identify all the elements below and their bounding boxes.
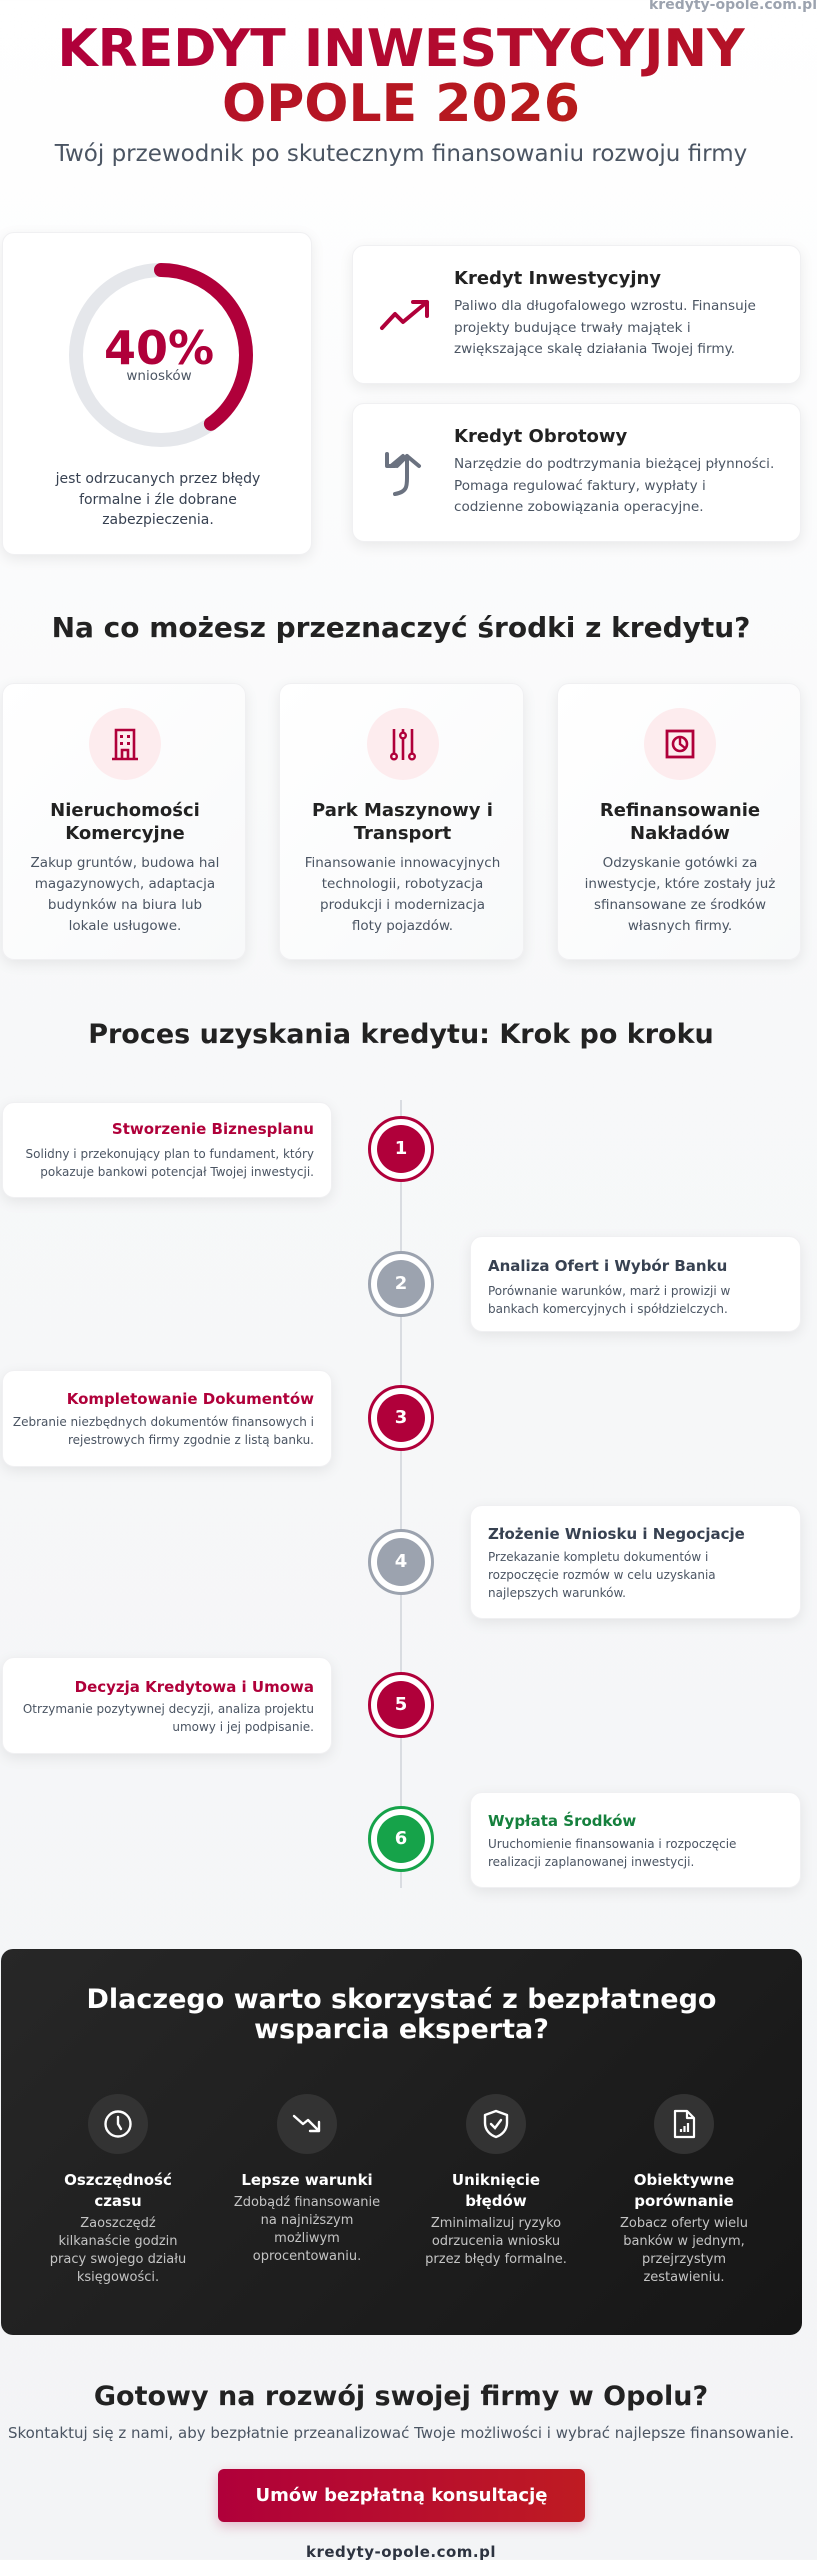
icon: trend up — [380, 300, 430, 330]
dark heading — [87, 1984, 716, 2045]
title — [57, 19, 745, 134]
step marker 4 — [368, 1529, 434, 1595]
cta button: Umów bezpłatną konsultację — [256, 2485, 547, 2506]
benefit: obiektywne porównanie: porównanie — [634, 2192, 734, 2210]
benefit: obiektywne porównanie: zestawieniu. — [643, 2270, 725, 2285]
step marker 3 — [368, 1385, 434, 1451]
card text: Odzyskanie gotówki za — [603, 855, 757, 871]
benefit: obiektywne porównanie: przejrzystym — [642, 2252, 726, 2267]
benefit: oszczędność czasu: pracy swojego działu — [50, 2252, 186, 2267]
title: OPOLE 2026 — [222, 74, 580, 134]
stat description: formalne i źle dobrane — [79, 492, 237, 508]
card title: Komercyjne — [65, 823, 185, 844]
step 6 — [470, 1792, 801, 1888]
benefit: obiektywne porównanie — [620, 2094, 748, 2285]
heading: Kredyt Obrotowy — [454, 426, 627, 447]
step marker 5: 5 — [395, 1694, 407, 1715]
card text: własnych firmy. — [628, 918, 732, 934]
benefit: lepsze warunki — [234, 2094, 380, 2264]
dark heading: wsparcia eksperta? — [254, 2014, 549, 2045]
benefit: oszczędność czasu — [50, 2094, 186, 2285]
dark heading: Dlaczego warto skorzystać z bezpłatnego — [87, 1984, 716, 2015]
panel: nieruchomości — [2, 683, 246, 960]
card text — [305, 855, 500, 934]
stat label: wniosków — [126, 368, 192, 384]
step 5: Otrzymanie pozytywnej decyzji, analiza projektu umowy i jej podpisanie. — [23, 1702, 314, 1734]
step 3 — [2, 1370, 332, 1467]
cta text: Skontaktuj się z nami, aby bezpłatnie przeanalizować Twoje możliwości i wybrać najlepsze finansowanie. — [8, 2424, 794, 2442]
stat description: zabezpieczenia. — [102, 512, 214, 528]
step 6: Wypłata Środków — [488, 1812, 636, 1830]
panel: park maszynowy — [279, 683, 524, 960]
step 1: Solidny i przekonujący plan to fundament, który pokazuje bankowi potencjał Twojej inwestycji. — [26, 1147, 314, 1179]
benefit: lepsze warunki: możliwym — [274, 2231, 340, 2246]
step marker 4: 4 — [395, 1551, 407, 1572]
title: KREDYT INWESTYCYJNY — [57, 19, 745, 79]
heading: proces: Proces uzyskania kredytu: Krok po kroku — [88, 1019, 714, 1050]
text: Narzędzie do podtrzymania bieżącej płynności. — [454, 456, 774, 472]
step marker 6: 6 — [395, 1828, 407, 1849]
heading: Kredyt Inwestycyjny — [454, 268, 661, 289]
step 6: Uruchomienie finansowania i rozpoczęcie realizacji zaplanowanej inwestycji. — [488, 1837, 736, 1869]
step 3: Kompletowanie Dokumentów — [67, 1390, 314, 1408]
text: codzienne zobowiązania operacyjne. — [454, 499, 704, 515]
step marker 5 — [368, 1672, 434, 1738]
card text: produkcji i modernizacja — [320, 897, 485, 913]
step 5: Decyzja Kredytowa i Umowa — [75, 1678, 314, 1696]
stat description — [55, 471, 260, 528]
panel: stat card — [2, 232, 312, 555]
step 1: Stworzenie Biznesplanu — [112, 1120, 314, 1138]
text: Paliwo dla długofalowego wzrostu. Finansuje — [454, 298, 756, 314]
card title: Refinansowanie — [600, 800, 760, 821]
card title — [600, 800, 760, 844]
step 2: Porównanie warunków, marż i prowizji w bankach komercyjnych i spółdzielczych. — [488, 1284, 730, 1316]
step 4: Przekazanie kompletu dokumentów i rozpoczęcie rozmów w celu uzyskania najlepszych warunków. — [488, 1550, 716, 1600]
card title: Nieruchomości — [50, 800, 200, 821]
step 3: Zebranie niezbędnych dokumentów finansowych i rejestrowych firmy zgodnie z listą banku. — [13, 1415, 314, 1447]
icon: sliders — [367, 708, 439, 780]
card text — [31, 855, 219, 934]
text: zwiększające skalę działania Twojej firmy. — [454, 341, 735, 357]
benefit: oszczędność czasu: Zaoszczędź — [80, 2216, 156, 2231]
step marker 1: 1 — [395, 1138, 407, 1159]
heading: na co: Na co możesz przeznaczyć środki z kredytu? — [52, 611, 750, 644]
step marker 2: 2 — [395, 1273, 407, 1294]
card text: sfinansowane ze środków — [594, 897, 766, 913]
benefit: lepsze warunki: Zdobądź finansowanie — [234, 2195, 380, 2210]
panel: dlaczego warto (dark) — [1, 1949, 802, 2335]
step marker 1 — [368, 1116, 434, 1182]
card text: floty pojazdów. — [352, 918, 453, 934]
card text: Finansowanie innowacyjnych — [305, 855, 500, 871]
benefit: uniknięcie błędów: Uniknięcie — [452, 2171, 540, 2189]
card title: Transport — [354, 823, 451, 844]
card title — [312, 800, 493, 844]
benefit: oszczędność czasu: czasu — [94, 2192, 142, 2210]
icon: chart frame — [644, 708, 716, 780]
step marker 3: 3 — [395, 1407, 407, 1428]
text — [454, 298, 756, 357]
step 1 — [2, 1102, 332, 1198]
benefit: obiektywne porównanie: banków w jednym, — [623, 2234, 745, 2249]
benefit: obiektywne porównanie: Obiektywne — [634, 2171, 734, 2189]
panel: kredyt obrotowy — [352, 403, 801, 542]
benefit: uniknięcie błędów: błędów — [465, 2192, 527, 2210]
benefit: uniknięcie błędów: Zminimalizuj ryzyko — [431, 2216, 561, 2231]
step marker 6 — [368, 1806, 434, 1872]
text: projekty budujące trwały majątek i — [454, 320, 691, 336]
text: Pomaga regulować faktury, wypłaty i — [454, 478, 706, 494]
benefit: oszczędność czasu: Oszczędność — [64, 2171, 172, 2189]
panel: refinansowanie — [557, 683, 801, 960]
benefit: uniknięcie błędów: odrzucenia wniosku — [432, 2234, 560, 2249]
card text: inwestycje, które zostały już — [585, 876, 775, 892]
step marker 2 — [368, 1251, 434, 1317]
step 5 — [2, 1657, 332, 1754]
icon: turn arrow — [385, 452, 422, 496]
benefit: lepsze warunki: oprocentowaniu. — [253, 2249, 361, 2264]
icon: building — [89, 708, 161, 780]
card title: Park Maszynowy i — [312, 800, 493, 821]
benefit: uniknięcie błędów — [425, 2094, 567, 2267]
benefit: uniknięcie błędów: przez błędy formalne. — [425, 2252, 567, 2267]
card text: Zakup gruntów, budowa hal — [31, 855, 219, 871]
card title — [50, 800, 200, 844]
step 2: Analiza Ofert i Wybór Banku — [488, 1257, 727, 1275]
card text: lokale usługowe. — [69, 918, 181, 934]
stat value: 40% — [104, 321, 214, 375]
panel: kredyt inwestycyjny — [352, 245, 801, 384]
card text: magazynowych, adaptacja — [35, 876, 215, 892]
stat description: jest odrzucanych przez błędy — [56, 471, 260, 487]
benefit: oszczędność czasu: księgowości. — [77, 2270, 159, 2285]
cta button — [218, 2469, 585, 2522]
card text: technologii, robotyzacja — [322, 876, 483, 892]
card text — [585, 855, 775, 934]
card text: budynków na biura lub — [48, 897, 202, 913]
benefit: oszczędność czasu: kilkanaście godzin — [58, 2234, 178, 2249]
donut chart 40% — [69, 263, 253, 447]
benefit: lepsze warunki: na najniższym — [261, 2213, 353, 2228]
benefit: obiektywne porównanie: Zobacz oferty wielu — [620, 2216, 748, 2231]
timeline line — [400, 1100, 402, 1888]
step 2 — [470, 1236, 801, 1332]
benefit: lepsze warunki: Lepsze warunki — [241, 2171, 373, 2189]
step 4: Złożenie Wniosku i Negocjacje — [488, 1525, 745, 1543]
step 4 — [470, 1505, 801, 1619]
card title: Nakładów — [630, 823, 730, 844]
text — [454, 456, 774, 515]
cta heading: Gotowy na rozwój swojej firmy w Opolu? — [94, 2381, 708, 2412]
subtitle: Twój przewodnik po skutecznym finansowaniu rozwoju firmy — [55, 141, 747, 167]
